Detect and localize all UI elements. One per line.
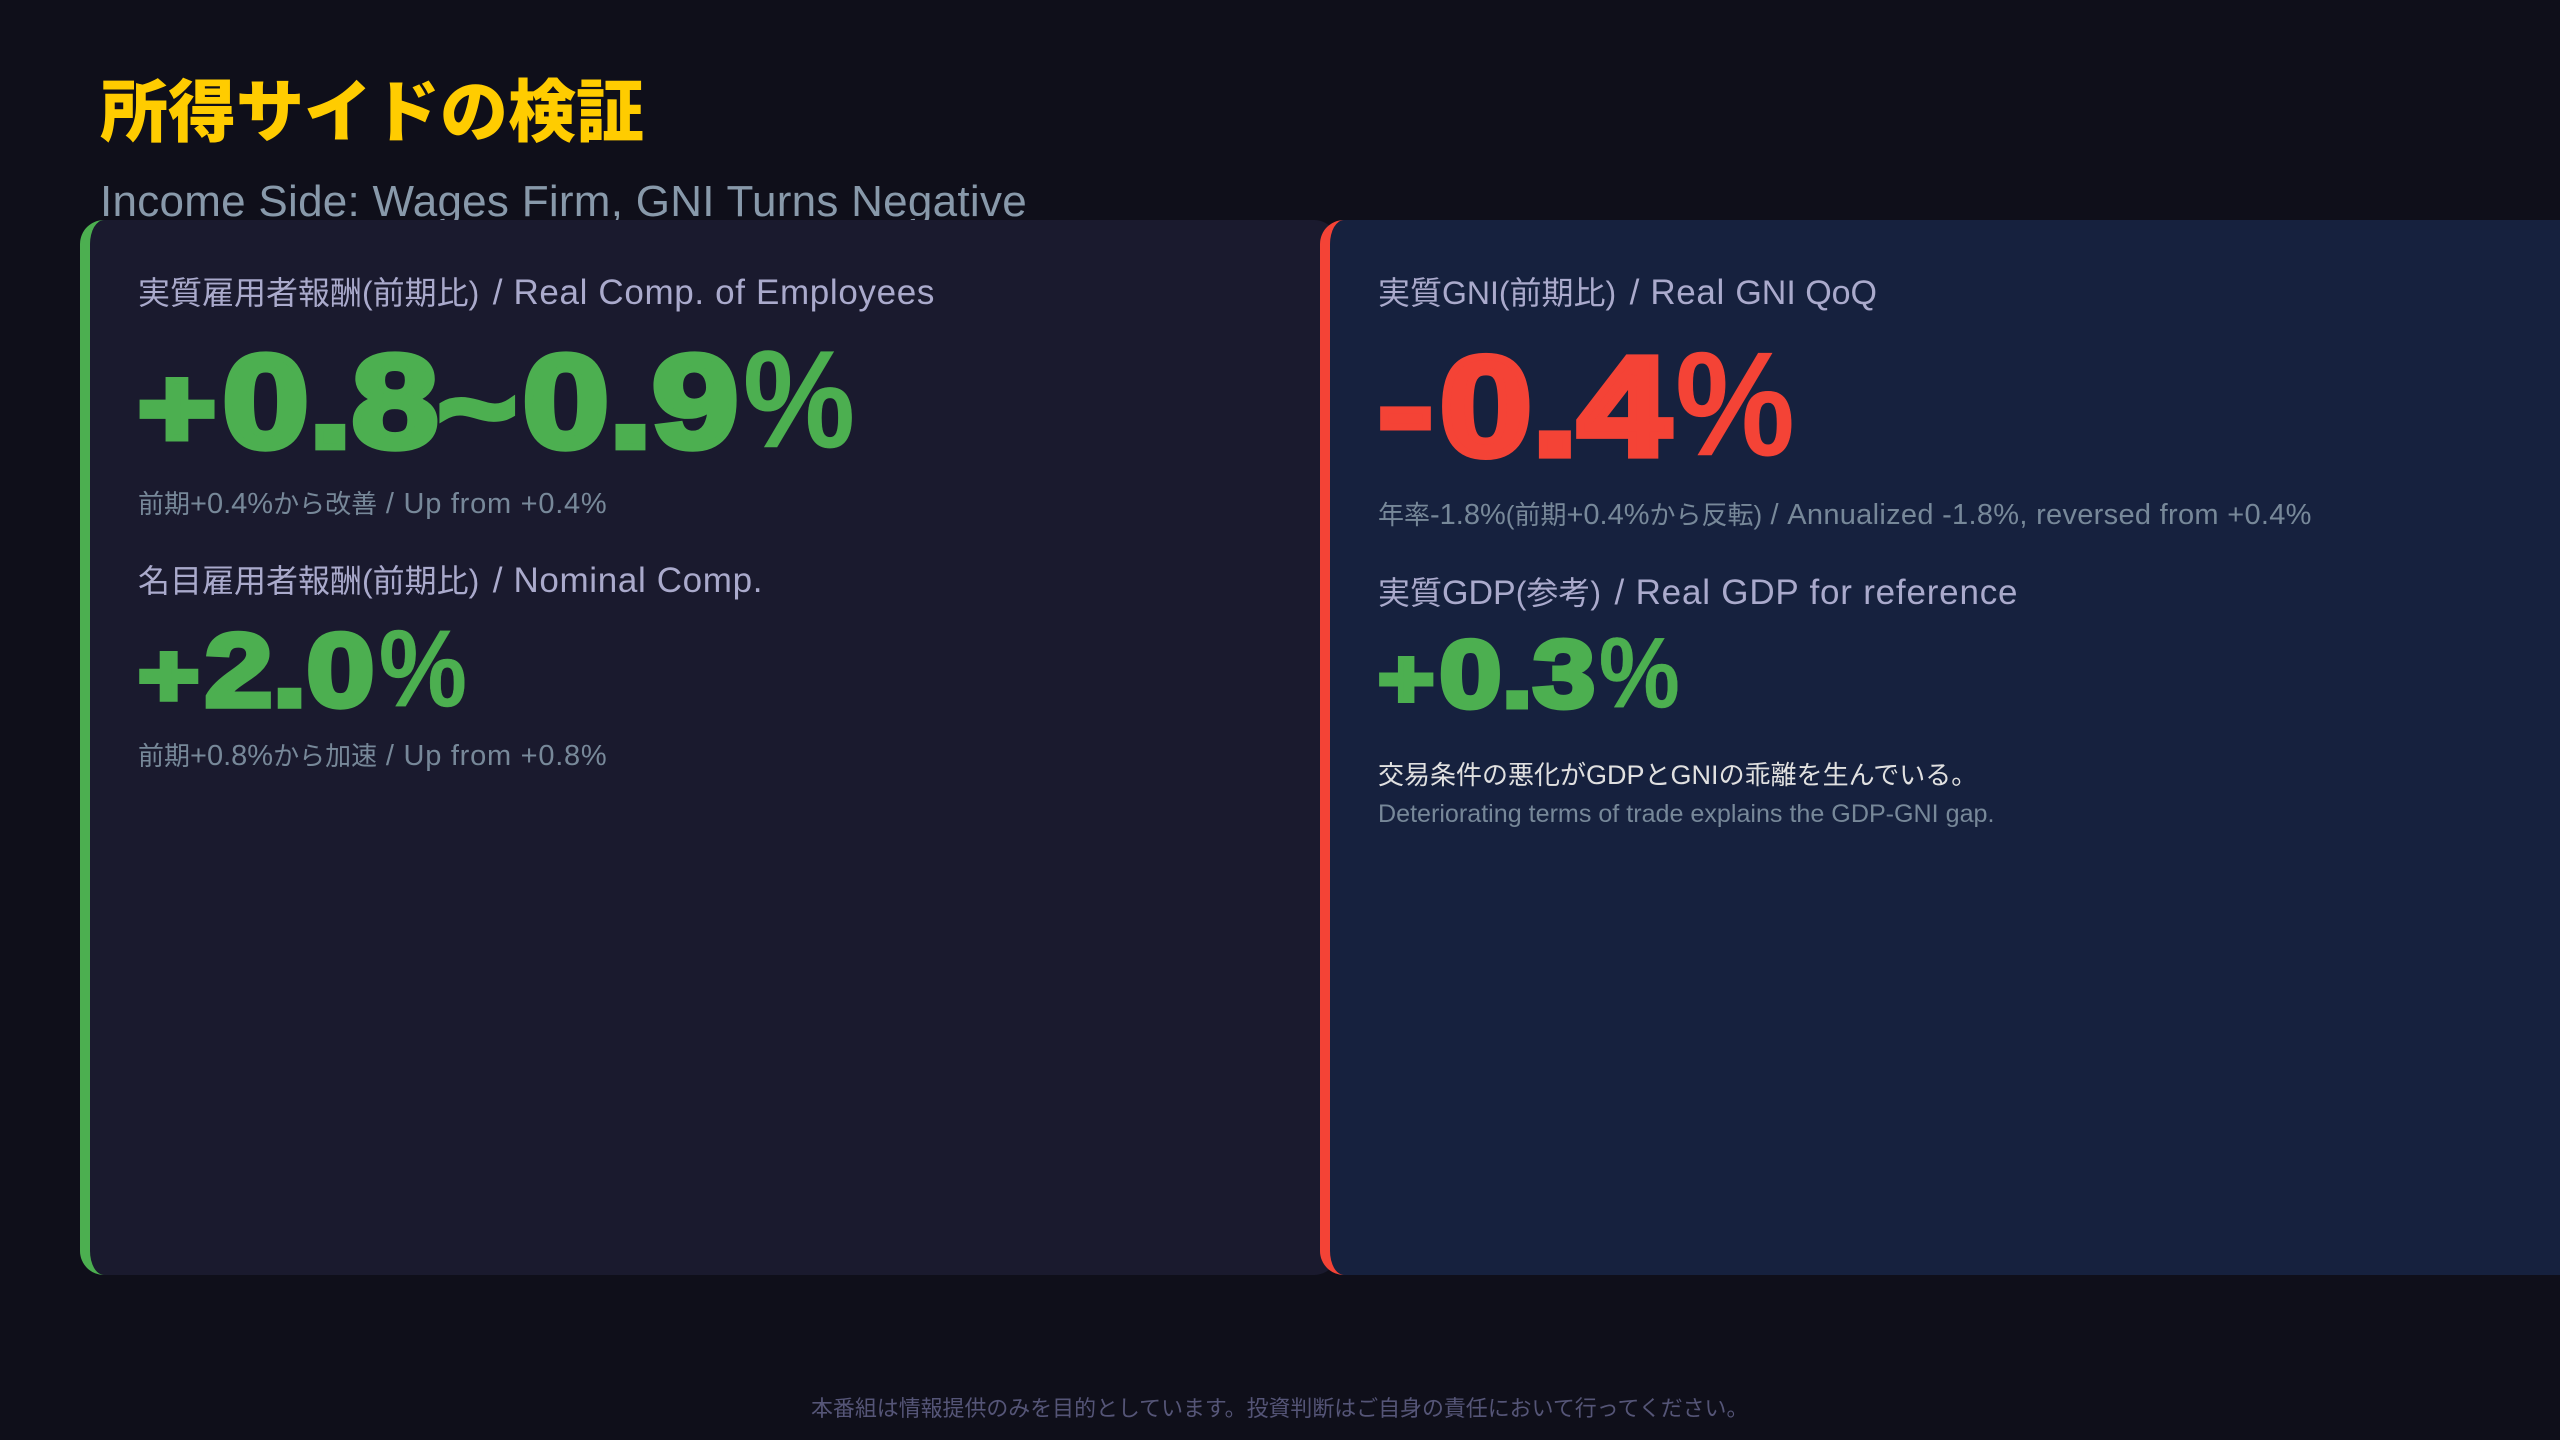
- label: nominal compensation: 名目雇用者報酬(前期比) / Nominal Comp.: [138, 561, 763, 600]
- callout: English: Deteriorating terms of trade explains the GDP-GNI gap.: [1378, 800, 1994, 828]
- value: real compensation: %: [743, 323, 855, 477]
- footer disclaimer: 本番組は情報提供のみを目的としています。投資判断はご自身の責任において行ってください。: [811, 1396, 1748, 1421]
- value: nominal compensation: +2.0: [138, 613, 375, 729]
- note: real compensation: 前期+0.4%から改善 / Up from +0.4%: [138, 488, 607, 520]
- value: real GDP: %: [1599, 617, 1680, 729]
- subtitle: Income Side: Wages Firm, GNI Turns Negative: [100, 177, 1027, 226]
- value: real GNI: -0.4: [1378, 327, 1670, 485]
- value: real GDP: [1378, 617, 1680, 729]
- value: real GDP: +0.3: [1378, 622, 1595, 728]
- label: real compensation: 実質雇用者報酬(前期比) / Real Comp. of Employees: [138, 273, 935, 312]
- note: nominal compensation: 前期+0.8%から加速 / Up from +0.8%: [138, 740, 607, 772]
- callout: Japanese: 交易条件の悪化がGDPとGNIの乖離を生んでいる。: [1378, 760, 1977, 790]
- value: nominal compensation: [138, 608, 466, 730]
- value: nominal compensation: %: [378, 608, 466, 730]
- note: real GNI: 年率-1.8%(前期+0.4%から反転) / Annualized -1.8%, reversed from +0.4%: [1378, 499, 2312, 531]
- panel: wages: [80, 220, 1338, 1275]
- label: real GNI: 実質GNI(前期比) / Real GNI QoQ: [1378, 273, 1877, 312]
- label: real GDP: 実質GDP(参考) / Real GDP for reference: [1378, 573, 2018, 612]
- panel: GNI: [1320, 220, 2560, 1275]
- value: real compensation: +0.8~0.9: [138, 328, 738, 475]
- value: real GNI: %: [1675, 322, 1795, 487]
- title: 所得サイドの検証: [100, 75, 644, 151]
- value: real GNI: [1378, 322, 1795, 487]
